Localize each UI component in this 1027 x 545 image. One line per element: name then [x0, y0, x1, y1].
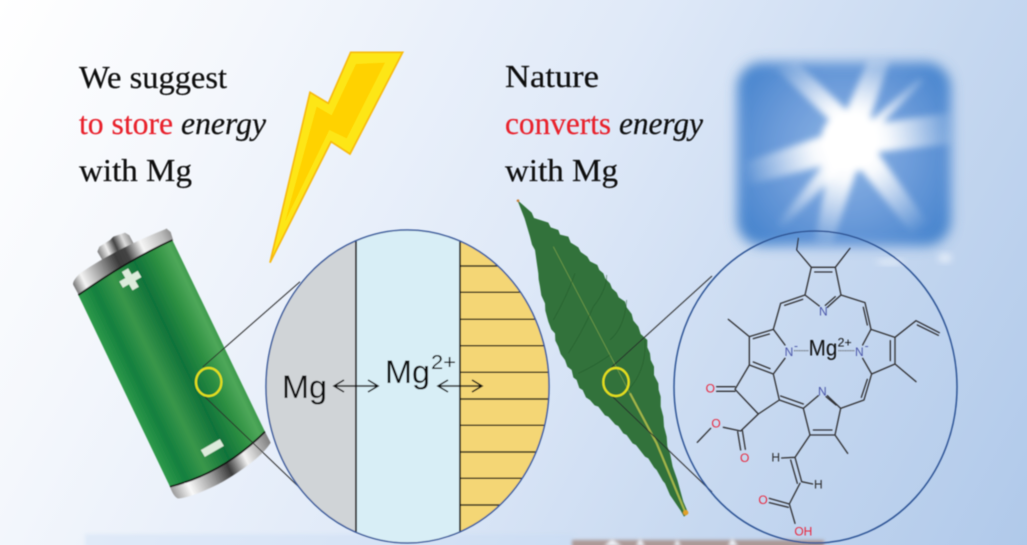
chart: molecular structure: OH [794, 524, 812, 538]
chart: molecular structure: O [706, 382, 715, 396]
chart: molecular structure: N [785, 345, 793, 359]
arrow: Mg2+ to electrode [438, 380, 482, 392]
label: Mg 2+ [385, 352, 456, 390]
callout lines: battery to magnified view [203, 282, 300, 488]
icon: blurred sun in blue sky [737, 60, 952, 265]
arrow: Mg to Mg2+ [334, 380, 378, 392]
chart: molecular structure: O [758, 493, 768, 507]
heading: we suggest to store energy with Mg: with Mg [79, 152, 192, 188]
heading: we suggest to store energy with Mg [79, 59, 267, 188]
label: Mg 2+: Mg [385, 354, 430, 390]
chart: molecular structure: N [819, 304, 828, 318]
icon: green battery [73, 229, 271, 499]
panel: magnified battery cell [260, 225, 555, 545]
heading: nature converts energy with Mg: converts energy [505, 105, 704, 141]
chart: molecular structure [697, 238, 939, 538]
heading: nature converts energy with Mg: Nature [505, 58, 599, 94]
icon: lightning bolt [270, 52, 403, 263]
chart: molecular structure: O [740, 451, 749, 465]
heading: we suggest to store energy with Mg: We suggest [79, 59, 227, 95]
marker: yellow circle on battery [196, 368, 221, 396]
callout lines: leaf to molecule view [612, 276, 712, 492]
icon: green leaf [517, 199, 688, 517]
chart: molecular structure: H [771, 451, 780, 465]
battery minus sign [201, 439, 224, 457]
chart: molecular structure: - [794, 338, 798, 352]
label: Mg: Mg [282, 369, 327, 405]
label: Mg 2+: 2+ [431, 352, 456, 374]
heading: nature converts energy with Mg: with Mg [505, 152, 618, 188]
chart: molecular structure: - [865, 338, 869, 352]
marker: yellow circle on leaf [603, 368, 629, 396]
chart: molecular structure: 2+ [838, 336, 852, 350]
chart: molecular structure: N [855, 345, 864, 359]
heading: we suggest to store energy with Mg: to store energy [79, 105, 267, 141]
chart: molecular structure: N [818, 385, 827, 399]
chart: molecular structure: Mg [809, 335, 837, 360]
panel: chlorophyll molecule view [674, 231, 957, 543]
bottom strip: cropped lower image [85, 534, 824, 545]
chart: molecular structure: H [814, 478, 823, 492]
battery plus sign [116, 265, 145, 294]
chart: molecular structure: O [711, 417, 721, 431]
heading: nature converts energy with Mg [505, 58, 704, 188]
